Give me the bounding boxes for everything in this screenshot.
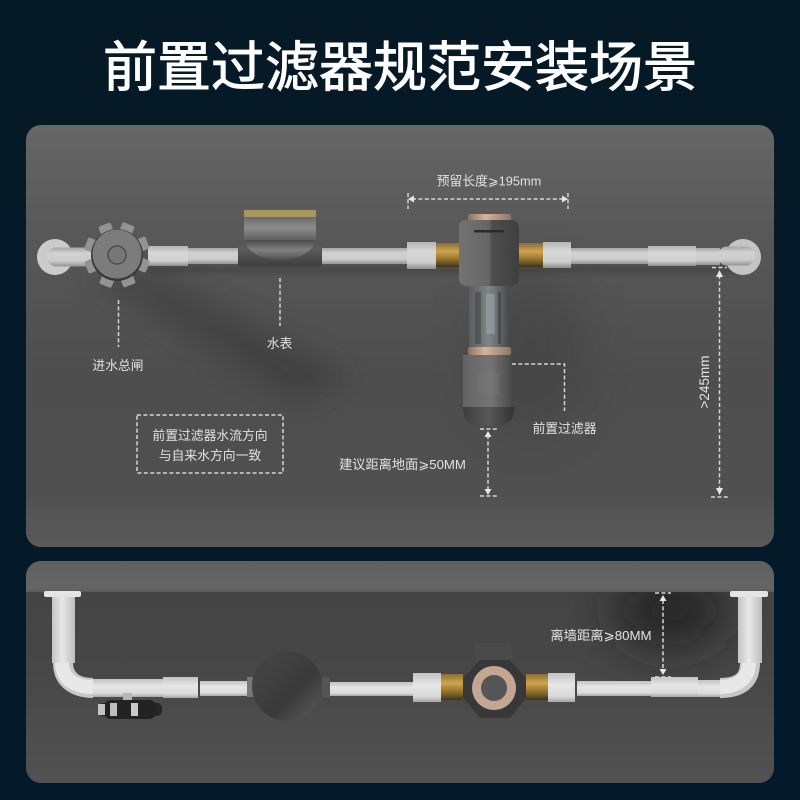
right pipe run: [577, 591, 768, 697]
icon: valve top view: [98, 693, 162, 719]
dimension: reserved length: [408, 174, 568, 209]
panel: front view installation: [26, 125, 774, 547]
dimension: distance from wall: 离墙距离⩾80MM: [550, 627, 652, 643]
shadow behind pipe: [615, 572, 725, 648]
callout: water meter label: 水表: [267, 336, 292, 351]
left fittings: [413, 673, 463, 702]
left wall elbow: [37, 239, 93, 275]
rose gold ring: [468, 347, 511, 355]
callout: flow direction note: [137, 415, 283, 473]
head body: [459, 220, 519, 286]
icon: water meter: [238, 210, 322, 266]
icon: pre-filter top view: [413, 660, 575, 718]
callout: pre-filter label: [512, 364, 597, 436]
left fittings: [407, 242, 459, 269]
icon: pre-filter front: [407, 214, 571, 426]
panel: top view installation: [26, 561, 774, 783]
right wall elbow: [718, 239, 761, 275]
callout: pre-filter label: 前置过滤器: [533, 421, 597, 436]
dimension: distance from wall: [550, 593, 671, 677]
callout: inlet valve label: 进水总闸: [92, 358, 144, 373]
wall background: [26, 125, 774, 547]
ceiling band: [26, 561, 774, 592]
right fittings: [519, 242, 571, 268]
dimension: >245mm height: [697, 268, 728, 497]
handle: [474, 643, 513, 668]
dial centre: [481, 675, 507, 701]
dimension: reserved length: 预留长度⩾195mm: [437, 174, 541, 188]
pipe run: [148, 246, 720, 266]
lower body: [463, 355, 514, 426]
callout: flow direction note: 前置过滤器水流方向: [152, 428, 268, 443]
left pipe run: [44, 591, 414, 698]
dimension: >245mm height: >245mm: [697, 356, 712, 408]
right fittings: [526, 673, 575, 702]
wall / floor background: [26, 561, 774, 783]
hex body: [463, 660, 526, 718]
title: 前置过滤器规范安装场景: [103, 38, 697, 98]
icon: inlet main valve: [84, 222, 150, 288]
dimension: distance to floor: [339, 429, 497, 496]
callout: inlet valve label: [92, 300, 144, 373]
head cap: [468, 214, 511, 220]
shadows on wall: [115, 266, 733, 399]
icon: water meter top view: [247, 651, 330, 721]
floor: [26, 532, 774, 547]
callout: flow direction note: 与自来水方向一致: [159, 448, 261, 463]
transparent housing: [469, 285, 509, 348]
callout: water meter label: [267, 278, 292, 351]
rose gold dial: [472, 666, 516, 710]
dimension: distance to floor: 建议距离地面⩾50MM: [339, 456, 466, 472]
